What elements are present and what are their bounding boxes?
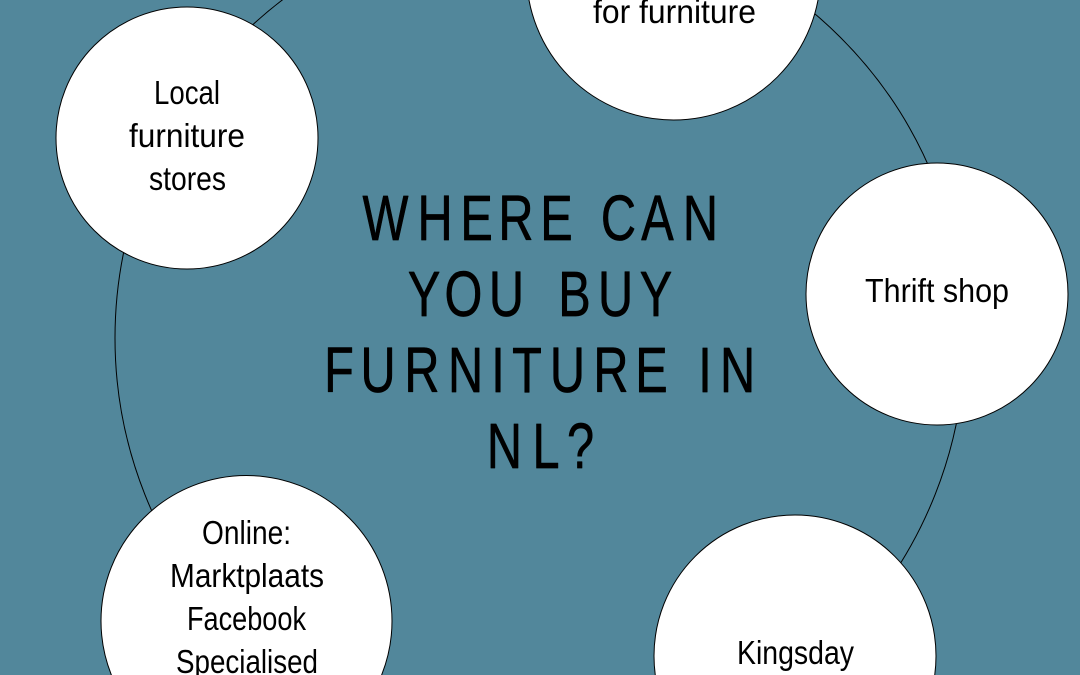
circle: local furniture stores: furniture	[129, 117, 245, 154]
circle: local furniture stores: Local	[154, 74, 220, 111]
circle: thrift shop	[806, 163, 1068, 425]
title: WHERE CAN	[363, 184, 718, 255]
connecting ring	[115, 0, 965, 675]
title: FURNITURE IN	[324, 336, 755, 407]
title: NL?	[487, 412, 594, 483]
circle: furniture shops (top, cropped)	[526, 0, 820, 120]
circle: online options: Online:	[202, 514, 291, 551]
title: YOU BUY	[408, 260, 672, 331]
circle: local furniture stores: stores	[149, 160, 226, 197]
circle: online options: Facebook	[187, 600, 306, 637]
title	[324, 184, 755, 483]
circle: thrift shop: Thrift shop	[865, 272, 1009, 309]
circle: Kingsday: Kingsday	[737, 634, 854, 671]
circle: online options	[101, 476, 392, 675]
circle: Kingsday	[654, 515, 936, 675]
circle: local furniture stores	[56, 7, 318, 269]
circle: online options: Marktplaats	[170, 557, 324, 594]
